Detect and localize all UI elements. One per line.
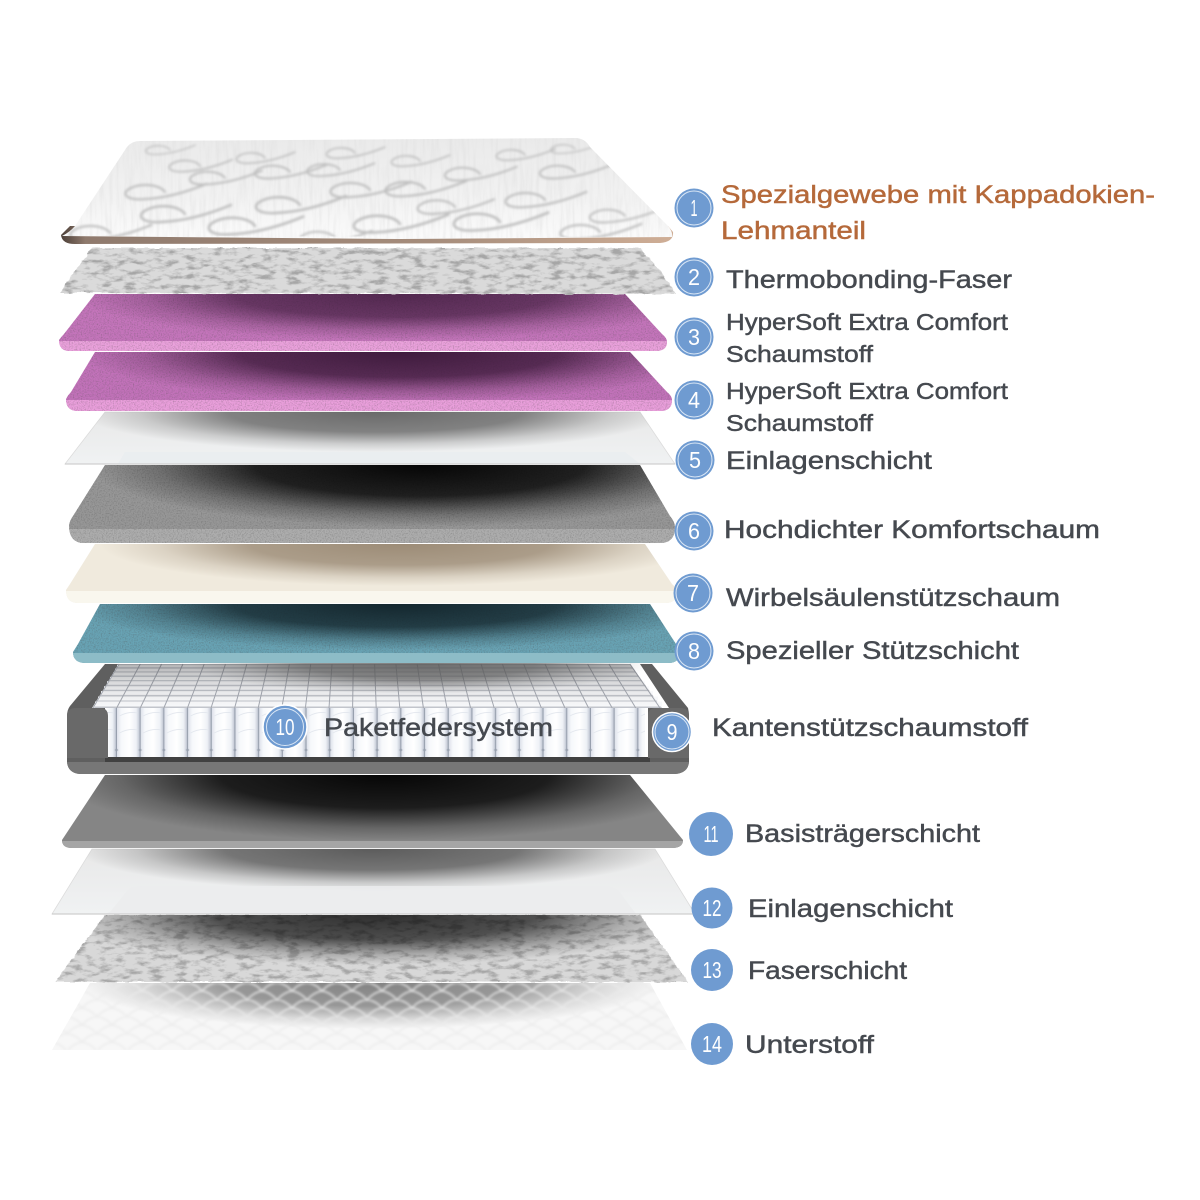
text: Spezialgewebe: Spezialgewebe mit Kappadokien- — [721, 181, 1155, 209]
layer 6: high density comfort foam — [69, 465, 675, 543]
frame front corners — [67, 708, 689, 758]
text: HyperSoft: HyperSoft Extra Comfort — [726, 378, 1009, 404]
badge 12: 12 — [702, 895, 722, 921]
badge 10 — [263, 705, 307, 749]
layer 11: base carrier layer — [62, 775, 683, 848]
label 2 — [674, 258, 1012, 296]
label 14 — [691, 1023, 874, 1065]
badge 10: 10 — [276, 714, 294, 740]
label 10 — [263, 705, 553, 749]
label 9 — [652, 712, 1028, 752]
badge 9 — [652, 712, 692, 752]
label 11 — [689, 812, 980, 856]
text: Einlagenschicht: Einlagenschicht — [748, 895, 953, 923]
text: Spezialgewebe — [721, 181, 1155, 245]
label 5 — [676, 440, 932, 480]
label 4 — [674, 378, 1009, 436]
label 13 — [691, 949, 907, 991]
text: Spezialgewebe: Lehmanteil — [721, 217, 866, 245]
spring column gaps — [93, 664, 660, 708]
badge 3 — [674, 318, 714, 356]
text: HyperSoft: Schaumstoff — [726, 410, 874, 436]
layer 1: quilted top fabric — [61, 138, 673, 245]
badge 12 — [692, 888, 732, 928]
layer 14: bottom fabric — [55, 983, 684, 1050]
badge 4: 4 — [688, 387, 700, 413]
text: Paketfedersystem: Paketfedersystem — [324, 714, 553, 742]
label 6 — [674, 512, 1100, 550]
badge 11: 11 — [704, 821, 718, 847]
label 1 — [674, 181, 1155, 245]
text: HyperSoft — [726, 309, 1009, 367]
front column — [105, 708, 645, 757]
badge 14 — [691, 1023, 733, 1065]
badge 7 — [674, 574, 712, 612]
badge 13 — [691, 949, 733, 991]
layer 13: fibre layer — [56, 914, 688, 983]
text: Basisträgerschicht: Basisträgerschicht — [745, 820, 980, 848]
badge 13: 13 — [702, 957, 722, 983]
text: HyperSoft: HyperSoft Extra Comfort — [726, 309, 1009, 335]
layer 8: support layer — [73, 604, 677, 663]
badge 8 — [674, 632, 714, 670]
text: Wirbelsäulenstützschaum: Wirbelsäulenstützschaum — [726, 584, 1060, 612]
badge 4 — [674, 380, 714, 420]
badge 6: 6 — [688, 518, 700, 544]
text: Hochdichter Komfortschaum: Hochdichter Komfortschaum — [724, 516, 1100, 544]
layer 4: HyperSoft foam — [66, 352, 672, 411]
badge 3: 3 — [688, 324, 700, 350]
badge 6 — [674, 512, 714, 550]
layer 2: thermobonding fibre — [60, 248, 676, 294]
badge 1 — [674, 188, 714, 228]
badge 5 — [676, 440, 714, 480]
row shading — [94, 664, 662, 708]
badge 7: 7 — [687, 580, 699, 606]
badge 9: 9 — [666, 719, 678, 745]
layer 12: insert layer — [52, 848, 692, 915]
fabric edge — [61, 226, 673, 244]
text: Faserschicht: Faserschicht — [748, 957, 907, 985]
badge 14: 14 — [702, 1031, 722, 1057]
layer 5: insert layer — [64, 412, 676, 465]
badge 5: 5 — [689, 447, 701, 473]
layer 7: spine support foam — [66, 544, 674, 603]
badge 8: 8 — [688, 638, 700, 664]
text: HyperSoft — [726, 378, 1009, 436]
label 12 — [692, 888, 953, 928]
label 8 — [674, 632, 1019, 670]
label 7 — [674, 574, 1060, 612]
badge 1: 1 — [690, 195, 698, 221]
badge 2 — [674, 258, 714, 296]
badge 2: 2 — [688, 264, 700, 290]
badge 11 — [689, 812, 733, 856]
layer 9: edge support foam frame — [67, 664, 689, 774]
text: Thermobonding-Faser: Thermobonding-Faser — [726, 266, 1012, 294]
quilted face — [62, 138, 672, 239]
label 3 — [674, 309, 1009, 367]
text: Spezieller Stützschicht: Spezieller Stützschicht — [726, 637, 1019, 665]
text: Unterstoff: Unterstoff — [745, 1031, 874, 1059]
text: HyperSoft: Schaumstoff — [726, 341, 874, 367]
spring rows — [95, 666, 662, 704]
quilting pattern — [70, 144, 662, 245]
text: Kantenstützschaumstoff: Kantenstützschaumstoff — [712, 714, 1028, 742]
layer 3: HyperSoft foam — [59, 294, 667, 351]
layer 10: pocket spring system — [93, 634, 662, 757]
text: Einlagenschicht: Einlagenschicht — [726, 447, 932, 475]
